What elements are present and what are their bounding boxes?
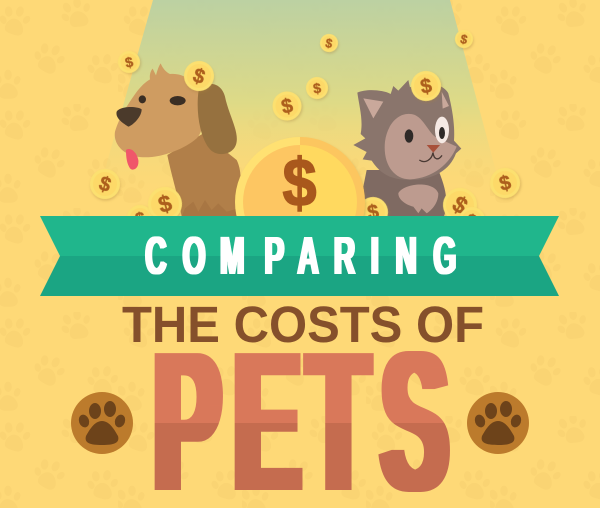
coin: $ — [312, 80, 322, 96]
coin on cat — [409, 69, 443, 103]
coin — [270, 89, 304, 123]
front coins — [144, 57, 487, 235]
coin — [487, 165, 523, 201]
cat right ear — [442, 92, 449, 109]
coin on cat: $ — [419, 75, 434, 99]
cat head — [353, 80, 461, 180]
dog ear — [198, 84, 237, 154]
coin — [457, 205, 487, 235]
green ribbon banner — [40, 216, 559, 296]
cat chest — [398, 185, 438, 213]
coin on dog — [180, 57, 218, 95]
cat illustration — [353, 80, 461, 217]
dog head — [115, 63, 203, 157]
coin — [319, 33, 339, 53]
coin: $ — [279, 95, 295, 119]
cat nose — [427, 145, 440, 153]
coin — [453, 28, 475, 50]
banner heading: COMPARING: COMPARING — [145, 227, 456, 286]
big central coin: $ — [282, 144, 317, 221]
coin: $ — [96, 173, 113, 197]
cat left ear — [363, 98, 383, 118]
paw badge right — [467, 392, 529, 454]
dog nose — [116, 107, 142, 127]
coin — [144, 183, 186, 225]
big central coin — [235, 137, 365, 267]
dog body — [167, 133, 241, 217]
coin: $ — [366, 201, 381, 225]
coin — [305, 76, 329, 100]
spotlight beam — [95, 0, 505, 205]
coin: $ — [448, 191, 472, 220]
coin — [356, 195, 390, 229]
dog tongue — [126, 149, 138, 170]
dog eye — [139, 95, 146, 103]
back coins — [86, 28, 523, 233]
coin: $ — [459, 32, 469, 47]
coin: $ — [324, 36, 334, 51]
cat eye — [405, 129, 413, 143]
subheading: THE COSTS OF: THE COSTS OF — [122, 296, 484, 353]
dog chest fringe — [182, 200, 238, 217]
cat mouth — [419, 153, 442, 162]
coin — [437, 182, 483, 228]
coin: $ — [155, 190, 175, 218]
coin: $ — [134, 208, 147, 229]
coin — [86, 165, 124, 203]
paw badge left — [71, 392, 133, 454]
coin — [116, 49, 142, 75]
coin on dog: $ — [190, 65, 207, 89]
coin — [125, 203, 155, 233]
coin: $ — [124, 53, 135, 71]
dog eye — [170, 96, 186, 105]
cat muzzle — [385, 114, 457, 179]
cat eye — [439, 127, 445, 139]
cat eye patch — [435, 117, 449, 143]
cat body — [363, 170, 446, 217]
coin: $ — [497, 172, 513, 196]
dog illustration — [115, 63, 241, 217]
coin: $ — [466, 210, 479, 231]
